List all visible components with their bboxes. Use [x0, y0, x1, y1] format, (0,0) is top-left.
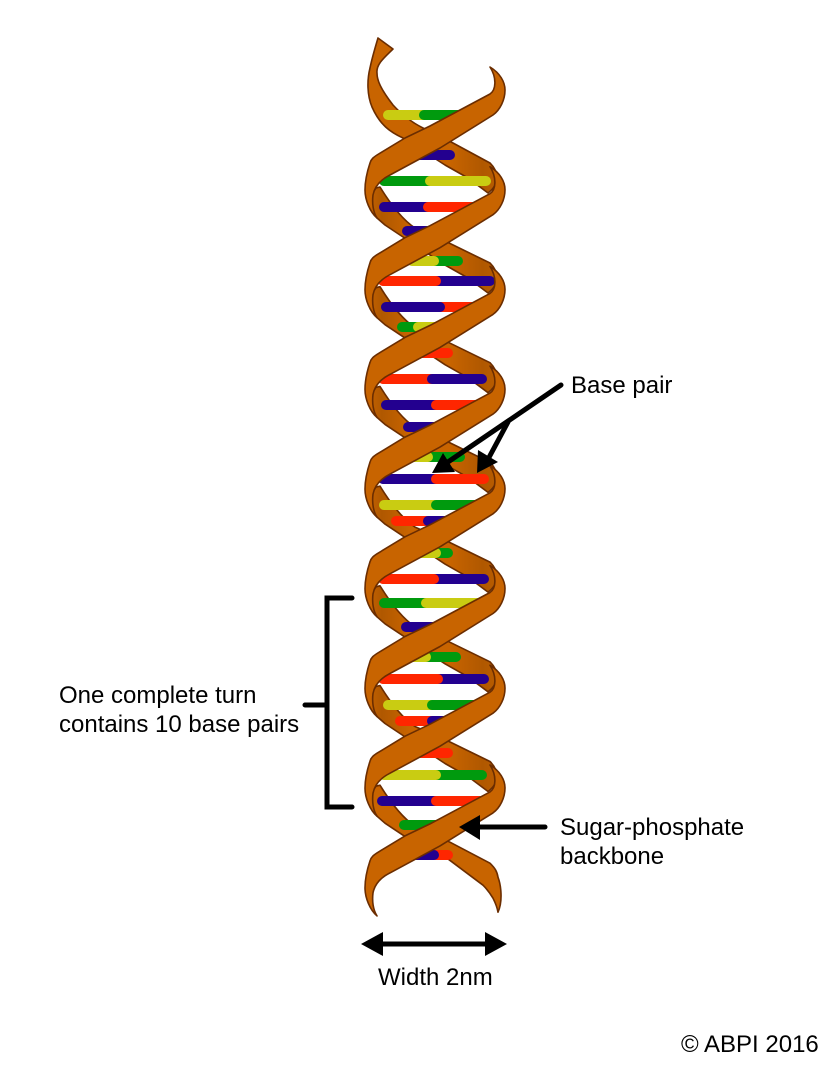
- arrow: width: [361, 932, 507, 956]
- arrow: sugar-phosphate backbone: [459, 815, 545, 840]
- label: one complete turn: contains 10 base pairs: [59, 711, 299, 738]
- base pairs: [382, 115, 490, 855]
- label: one complete turn: One complete turn: [59, 682, 256, 709]
- copyright: © ABPI 2016: [681, 1031, 819, 1058]
- back strands: [368, 38, 501, 912]
- label: width: Width 2nm: [378, 964, 493, 991]
- label: base pair: Base pair: [571, 372, 672, 399]
- front strands: [365, 67, 505, 916]
- arrow: base pair: [432, 385, 561, 473]
- label: sugar-phosphate backbone: Sugar-phosphate: [560, 814, 744, 841]
- bracket: one complete turn: [305, 598, 352, 807]
- label: sugar-phosphate backbone: backbone: [560, 843, 664, 870]
- double helix: [365, 38, 505, 916]
